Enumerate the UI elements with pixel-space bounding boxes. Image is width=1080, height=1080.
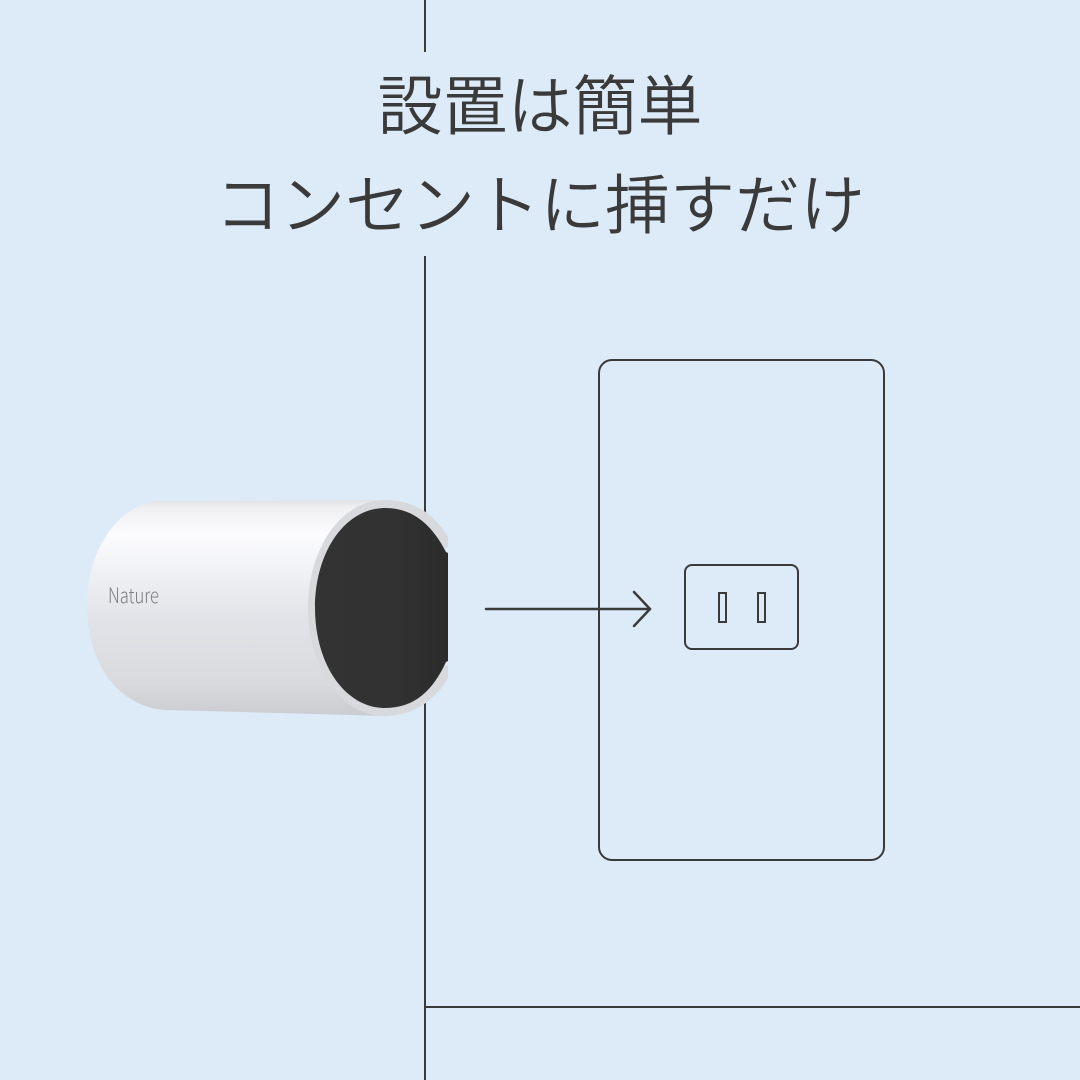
device rim xyxy=(308,500,448,716)
icon: power outlet xyxy=(685,565,798,649)
title line 1: 設置は簡単 xyxy=(377,70,702,143)
icon: wall plate xyxy=(599,360,884,860)
title line 2: コンセントに挿すだけ xyxy=(215,169,865,242)
title xyxy=(215,70,865,242)
device: Nature sensor xyxy=(87,500,448,716)
device body xyxy=(87,500,388,716)
device logo: Nature xyxy=(108,580,159,610)
arrow xyxy=(486,592,650,626)
wall edge lines xyxy=(425,0,1080,1080)
device face xyxy=(315,508,448,708)
